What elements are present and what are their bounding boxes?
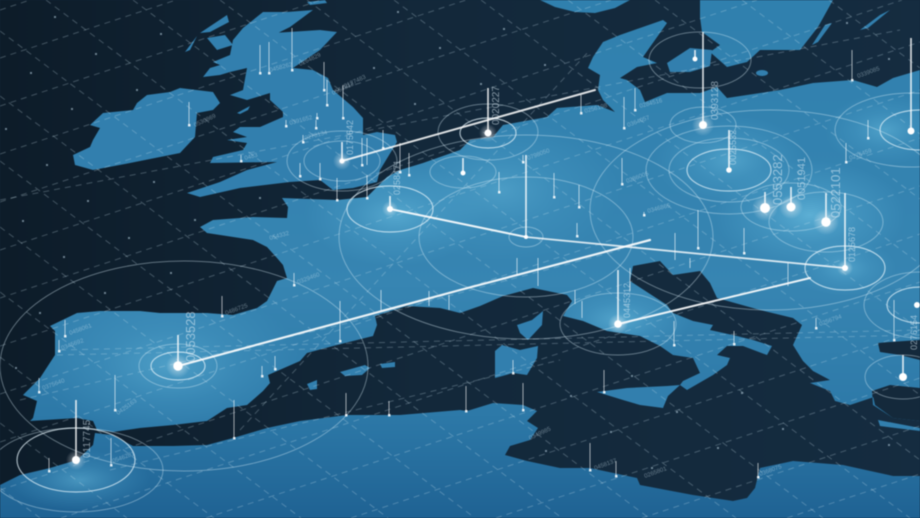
rotated node values: 0276154 — [909, 315, 919, 350]
small data labels: 0798050 — [527, 148, 551, 162]
orkney — [307, 0, 327, 5]
small data labels: 0458262 — [269, 62, 294, 74]
balearics — [340, 365, 370, 376]
islands — [73, 0, 920, 431]
sardinia — [495, 345, 538, 378]
stem feet — [38, 69, 896, 478]
danish inner water — [667, 48, 712, 72]
ireland — [73, 88, 220, 170]
node stems — [76, 32, 911, 460]
small data labels: 0564812 — [331, 81, 356, 97]
sicily — [597, 385, 680, 408]
node glows — [66, 114, 853, 470]
hebrides — [200, 15, 229, 33]
great britain — [187, 10, 397, 197]
small data labels: 0265801 — [644, 466, 668, 480]
rotated node values: 0053528 — [183, 311, 198, 362]
small data labels: 0364057 — [627, 115, 651, 129]
small data labels: 0458137 — [594, 458, 618, 472]
small data labels: 0264829 — [298, 52, 323, 68]
corsica — [517, 311, 543, 340]
rotated node values: 0393128 — [710, 81, 721, 120]
small data labels: 0286005 — [626, 171, 650, 185]
small data labels: 0349985 — [528, 426, 553, 442]
rotated node values: 0125678 — [847, 227, 857, 262]
rotated node values: 0051941 — [796, 157, 808, 200]
small data labels: 0483 — [244, 153, 259, 162]
baltic lakes — [860, 10, 890, 30]
rotated node values — [82, 81, 919, 458]
small data labels: 0375640 — [42, 378, 66, 392]
rotated node values: 0445312 — [622, 283, 632, 318]
rotated node values: 0522101 — [828, 167, 843, 218]
small data labels: 0256198 — [584, 103, 609, 115]
rotated node values: 0553282 — [770, 154, 785, 205]
small data labels: 0345692 — [61, 338, 85, 352]
nodes — [72, 56, 920, 464]
rotated node values: 0020227 — [491, 86, 502, 125]
rotated node values: 0117745 — [82, 419, 93, 458]
small data labels: 0425163 — [116, 398, 139, 417]
small data labels: 0284516 — [639, 98, 664, 110]
small data labels: 0276459 — [849, 148, 873, 162]
dark greek islands — [872, 340, 920, 421]
small data labels: 0546281 — [112, 451, 136, 465]
connection lines — [178, 90, 845, 366]
small data labels: 0127483 — [343, 74, 368, 90]
small data labels: 0346865 — [647, 203, 672, 215]
rotated node values: 0175642 — [345, 120, 355, 155]
small data labels: 0329460 — [297, 272, 321, 286]
small data labels: 0368075 — [759, 464, 783, 478]
rotated node values: 0025532 — [728, 130, 738, 165]
small data labels: 0339085 — [857, 66, 881, 80]
small data labels: 0256794 — [819, 314, 843, 328]
small data labels: 0391652 — [289, 115, 314, 127]
small data labels: 0530869 — [193, 113, 218, 129]
small data labels — [42, 52, 881, 480]
rotated node values: 0258471 — [392, 160, 402, 195]
isle of man — [237, 106, 250, 114]
land glows — [10, 95, 920, 510]
crete strip — [878, 420, 920, 431]
small data labels: 0278134 — [304, 130, 329, 142]
small data labels: 0486725 — [225, 303, 249, 317]
small data labels: 054332 — [269, 231, 290, 242]
bright rings — [17, 110, 920, 492]
small data labels: 0458061 — [69, 323, 93, 337]
